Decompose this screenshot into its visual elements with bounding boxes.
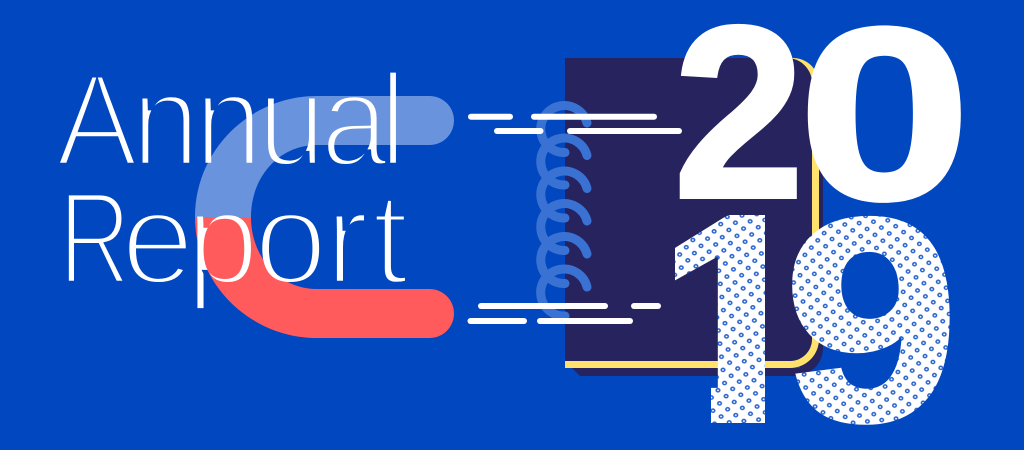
title: Annual Report: [60, 72, 405, 308]
speed lines: [470, 117, 679, 321]
notebook yellow edge: [565, 58, 819, 368]
ribbon upper half: [195, 96, 454, 217]
notebook cover: [565, 58, 812, 361]
title: Annual Report: Annual: [56, 47, 407, 194]
title: Annual Report: eport: [121, 164, 409, 312]
year: 19: [675, 215, 950, 425]
icon: notebook: [565, 58, 823, 376]
title: Annual Report: R: [59, 164, 131, 312]
banner: [60, 24, 961, 425]
icon: C-shaped ribbon: [195, 96, 454, 338]
icon: notebook spiral rings: [541, 106, 587, 316]
ribbon lower half: [195, 217, 454, 338]
notebook shadow: [572, 100, 823, 376]
year: 20: [674, 0, 971, 251]
